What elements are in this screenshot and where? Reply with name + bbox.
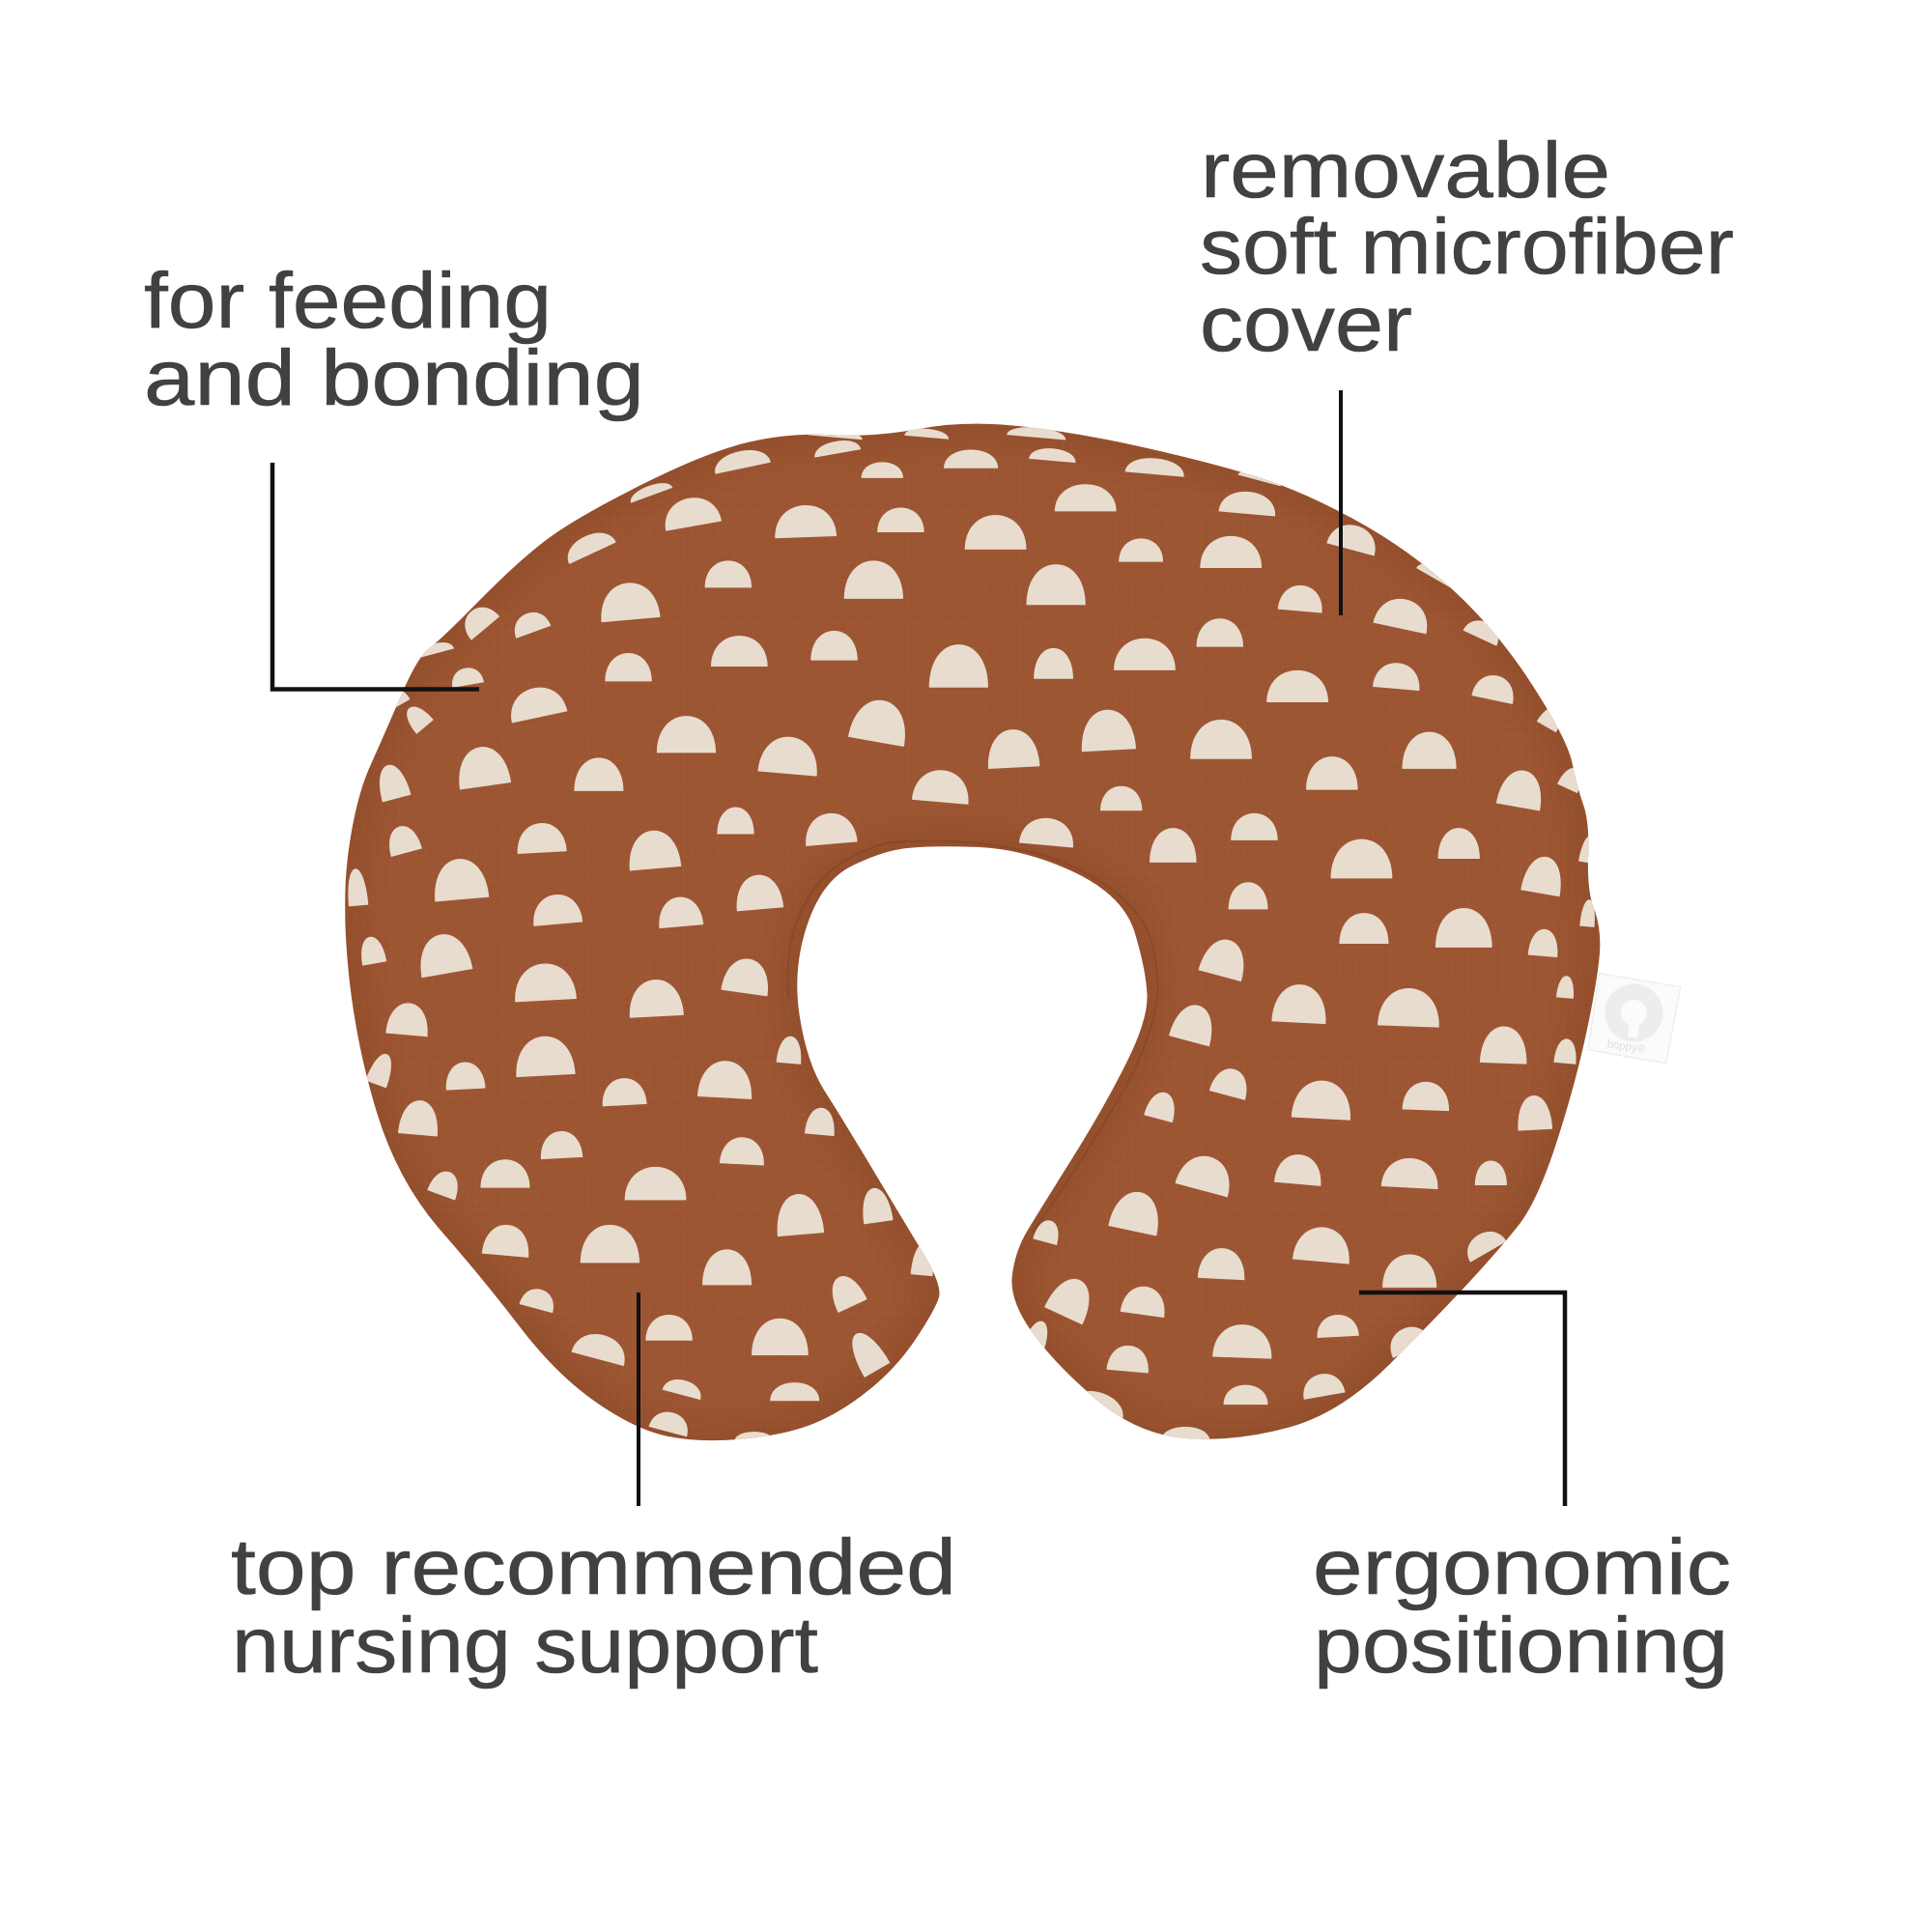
callout line: top recommended bbox=[637, 1293, 640, 1506]
callout line: for feeding and bonding bbox=[272, 463, 479, 690]
label: removable soft microfiber cover bbox=[1200, 127, 1734, 368]
label: ergonomic positioning bbox=[1313, 1523, 1731, 1690]
label: ergonomic positioning: positioning bbox=[1314, 1602, 1728, 1690]
pillow body bbox=[308, 394, 1627, 1466]
label: removable soft microfiber cover: cover bbox=[1200, 280, 1412, 368]
pillow product photo bbox=[308, 394, 1681, 1466]
label: top recommended nursing support bbox=[231, 1523, 956, 1690]
label: removable soft microfiber cover: soft microfiber bbox=[1200, 203, 1734, 291]
label: removable soft microfiber cover: removable bbox=[1201, 127, 1610, 214]
hang tag with logo: boppy® bbox=[1606, 1038, 1646, 1056]
label: for feeding and bonding bbox=[144, 257, 644, 422]
label: for feeding and bonding: for feeding bbox=[144, 257, 552, 345]
label: for feeding and bonding: and bonding bbox=[144, 334, 644, 422]
label: top recommended nursing support: top recommended bbox=[231, 1523, 956, 1611]
label: ergonomic positioning: ergonomic bbox=[1313, 1523, 1731, 1611]
inner seam bbox=[787, 840, 1158, 1233]
half-circle print bbox=[346, 425, 1598, 1441]
label: top recommended nursing support: nursing support bbox=[232, 1602, 818, 1690]
callout line: removable cover bbox=[1339, 390, 1343, 615]
callout line: ergonomic positioning bbox=[1359, 1293, 1565, 1506]
hang tag with logo bbox=[1588, 974, 1681, 1064]
